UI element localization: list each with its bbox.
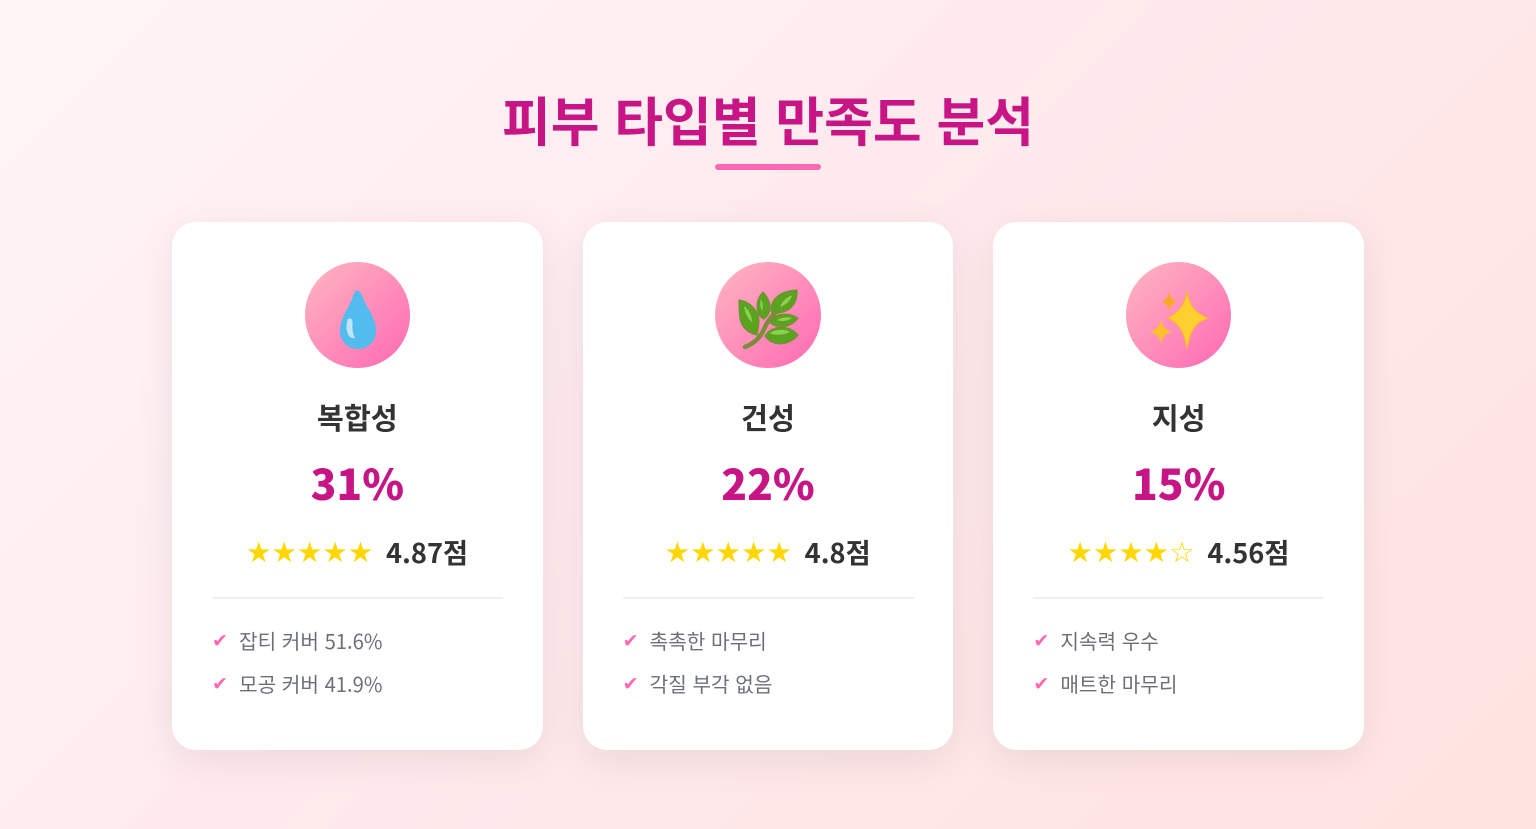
icon: sparkles: [1126, 262, 1231, 368]
rating: [246, 531, 468, 571]
panel: dry skin: [583, 222, 953, 750]
panel: oily skin: ✔: [1033, 673, 1049, 695]
rating: [1067, 531, 1289, 571]
panel: oily skin: 매트한 마무리: [1060, 669, 1177, 698]
feature: moist finish: [623, 626, 767, 655]
percentage: 31%: [311, 452, 404, 513]
stars: ★★★★★: [246, 536, 373, 569]
panel: combination skin: 잡티 커버 51.6%: [239, 626, 382, 655]
rating: [665, 531, 871, 571]
panel: dry skin: 각질 부각 없음: [650, 669, 772, 698]
panel: dry skin: 촉촉한 마무리: [650, 626, 767, 655]
panel: dry skin: ✔: [623, 630, 639, 652]
skin type name: 지성: [1152, 396, 1206, 438]
title underline: [715, 164, 821, 170]
panel: dry skin: ✔: [623, 673, 639, 695]
feature: no flaking: [623, 669, 772, 698]
feature: pore cover: [212, 669, 382, 698]
panel: oily skin: 지속력 우수: [1060, 626, 1159, 655]
stars: ★★★★★: [665, 536, 792, 569]
title: 피부 타입별 만족도 분석: [502, 81, 1034, 157]
score: 4.87점: [386, 531, 468, 571]
feature: blemish cover: [212, 626, 382, 655]
skin type name: 건성: [741, 396, 795, 438]
panel: oily skin: [993, 222, 1364, 750]
panel: combination skin: ✔: [212, 630, 228, 652]
score: 4.56점: [1207, 531, 1289, 571]
icon: water drop: [304, 262, 410, 368]
percentage: 15%: [1132, 452, 1225, 513]
skin type name: 복합성: [317, 396, 398, 438]
panel: combination skin: [172, 222, 543, 750]
panel: oily skin: ✔: [1033, 630, 1049, 652]
panel: combination skin: ✔: [212, 673, 228, 695]
icon: herb: [715, 262, 821, 368]
stars: ★★★★☆: [1067, 536, 1195, 569]
score: 4.8점: [805, 531, 871, 571]
feature: long lasting: [1033, 626, 1159, 655]
percentage: 22%: [721, 452, 815, 513]
feature: matte finish: [1033, 669, 1177, 698]
panel: combination skin: 모공 커버 41.9%: [239, 669, 382, 698]
